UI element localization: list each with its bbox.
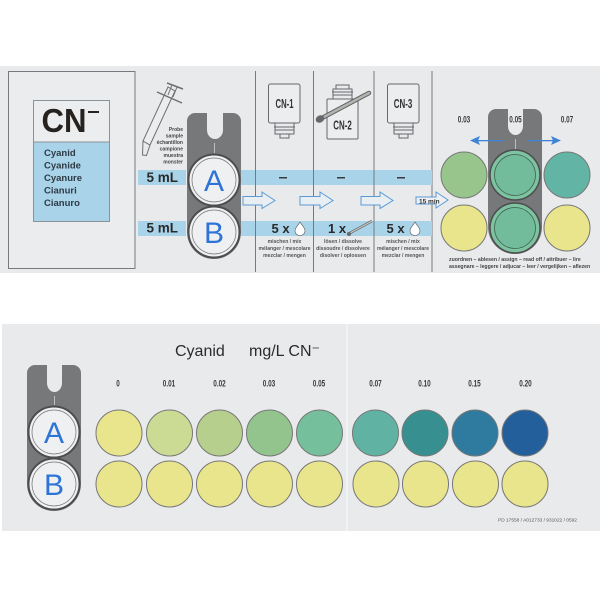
dashes in top band (279, 177, 405, 178)
chart unit: mg/L CN⁻ (249, 343, 320, 360)
step 2 caption: lösen / dissolve (324, 239, 362, 245)
comparator: chart: B (44, 469, 64, 502)
icon: drop 2 (410, 222, 420, 236)
dosing step labels: 5 x (386, 221, 405, 236)
comparator: step 1: A (204, 165, 224, 198)
concentration labels: 0.02 (213, 378, 226, 388)
names of parameter: Cyanure (44, 173, 82, 184)
arrow 1 (243, 192, 275, 208)
step 1 caption (258, 239, 311, 259)
step 3 caption: mélanger / mescolare (377, 246, 429, 252)
names of parameter: Cianuro (44, 198, 80, 209)
concentration labels: 0.01 (163, 378, 175, 388)
heading: CN-: CN (42, 102, 86, 139)
icon: syringe (142, 83, 183, 156)
chart title: Cyanid (175, 343, 225, 360)
step 1 caption: mischen / mix (268, 239, 302, 245)
reading colour discs (441, 152, 590, 251)
dosing step labels: 1 x (328, 221, 347, 236)
result values (458, 114, 573, 124)
icon: bottle CN-1 (268, 84, 300, 138)
concentration labels (116, 378, 532, 388)
sample label: Probe (169, 127, 183, 133)
blue double arrow (470, 136, 561, 145)
step 2 caption: dissoudre / dissolvere (316, 246, 370, 252)
product code: PD 17558 / A012733 / 931022 / 0592 (498, 518, 577, 524)
sample label: campione (160, 146, 183, 152)
volume labels: 5 mL (146, 170, 178, 185)
icon: bottle CN-2 with spoon (314, 85, 369, 139)
icon: bottle CN-2 with spoon: CN-2 (333, 118, 352, 132)
arrow 3 (361, 192, 393, 208)
icon: bottle CN-3 (388, 84, 419, 138)
step 1 caption: mélanger / mescolare (258, 246, 311, 252)
concentration labels: 0.20 (519, 378, 532, 388)
panel: colour chart (2, 324, 600, 531)
icon: bottle CN-3: CN-3 (394, 96, 412, 111)
step 2 caption (316, 239, 370, 259)
comparator: step 1 (187, 113, 241, 259)
icon: bottle CN-1: CN-1 (276, 96, 294, 111)
concentration labels: 0.07 (369, 378, 382, 388)
names of parameter: Cyanide (44, 160, 81, 172)
volume labels (146, 170, 178, 236)
concentration labels: 0.10 (418, 378, 431, 388)
row A colour discs (96, 410, 548, 456)
comparator: reading (488, 109, 542, 254)
panel: instructions (0, 66, 600, 273)
sample label: échantillon (157, 140, 183, 146)
dosing step labels: 5 x (272, 221, 290, 236)
sample label: sample (166, 134, 183, 140)
reading caption (449, 257, 590, 270)
volume labels: 5 mL (146, 220, 178, 236)
concentration labels: 0.05 (313, 378, 325, 388)
names of parameter: Cyanid (44, 148, 76, 159)
icon: spoon (347, 221, 372, 236)
dosing step labels (272, 221, 405, 236)
step 3 caption (377, 239, 429, 259)
icon: drop 1 (295, 222, 305, 236)
arrow 2 (300, 192, 333, 208)
result values: 0.05 (509, 114, 522, 124)
arrow: 15 min: 15 min (419, 198, 440, 206)
step 3 caption: mischen / mix (386, 239, 420, 245)
comparator: step 1: B (204, 217, 224, 250)
concentration labels: 0.15 (468, 378, 481, 388)
panel: parameter card (8, 72, 135, 268)
step 2 caption: disolver / oplossen (320, 253, 366, 259)
comparator: chart: A (44, 417, 64, 450)
step 1 caption: mezclar / mengen (263, 253, 306, 259)
comparator: chart (27, 365, 81, 511)
row B colour discs (96, 461, 548, 507)
names of parameter (44, 148, 82, 209)
sample label (157, 127, 183, 166)
sample label: muestra (164, 153, 183, 159)
names of parameter: Cianuri (44, 186, 77, 196)
concentration labels: 0.03 (263, 378, 275, 388)
reading caption: zuordnen – ablesen / assign – read off / attribuer – lire (449, 257, 581, 263)
arrow: 15 min (416, 192, 448, 208)
concentration labels: 0 (116, 378, 120, 388)
result values: 0.03 (458, 114, 470, 124)
sample label: monster (163, 160, 183, 166)
result values: 0.07 (561, 114, 573, 124)
step 3 caption: mezclar / mengen (382, 253, 424, 259)
reading caption: assegnare – leggere / adjucar – leer / vergelijken – aflezen (449, 264, 590, 270)
blue bands (138, 170, 432, 236)
